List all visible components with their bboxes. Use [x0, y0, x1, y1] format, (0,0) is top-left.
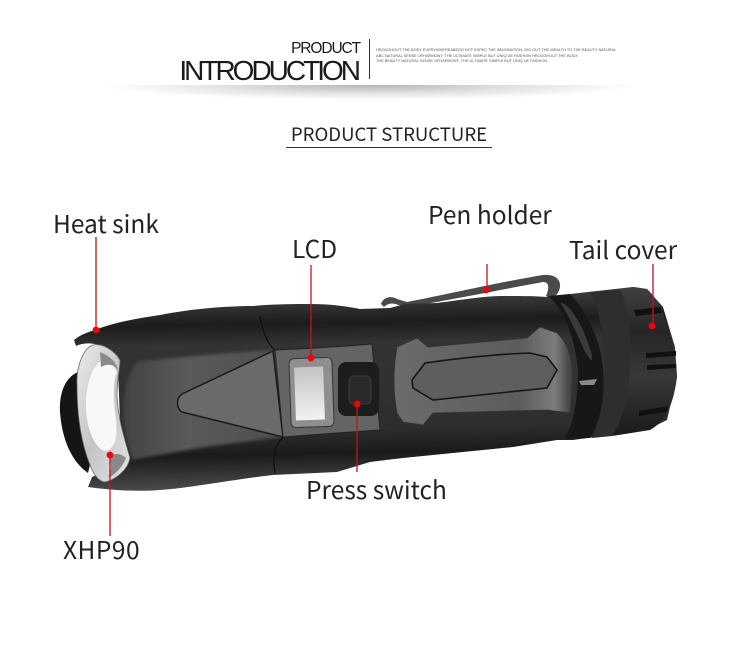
label: Heat sink: Heat sink: [53, 206, 159, 241]
header title: PRODUCT: [291, 40, 360, 57]
press switch: [338, 362, 379, 416]
marker dots: [93, 287, 655, 458]
header description: THE BEAUTY NATURAL SENSE OFHARMONY, THE ULTIMATE SIMPLE BUT UNIQ UE FASHION: [376, 58, 547, 63]
head front panel: [124, 350, 283, 460]
grip collar: [548, 294, 604, 438]
header band shadow: [100, 85, 640, 100]
head seam: [260, 316, 283, 473]
header divider: [369, 39, 370, 79]
header description: [376, 47, 616, 63]
clip: [381, 275, 560, 307]
label: XHP90: XHP90: [63, 532, 140, 567]
header title: [179, 40, 361, 86]
LCD: [289, 357, 334, 428]
label: LCD: LCD: [292, 231, 337, 266]
header description: ABC NATURAL SENSE OFHARMONY, THE ULTIMATE SIMPLE BUT UNIQ UE FASHION HROUGHOUT THE BODY: [376, 53, 578, 58]
grip plate: [394, 327, 573, 425]
lens back rim: [60, 372, 96, 473]
header title: INTRODUCTION: [179, 55, 358, 86]
label: Tail cover: Tail cover: [569, 232, 677, 267]
tail cover: [590, 287, 677, 438]
label: Press switch: Press switch: [306, 472, 447, 507]
body: [74, 287, 677, 491]
leader lines: [96, 237, 653, 536]
header description: HROUGHOUT THE BODY EVERYWHEREABEDO NOT EXPEC THE IMAGINATION, DIG OUT THE WEALTH TO THE BEAUTY NATURAL: [376, 47, 616, 52]
lens: [77, 345, 130, 482]
center plate: [275, 344, 380, 437]
label: Pen holder: Pen holder: [428, 197, 552, 232]
section heading: PRODUCT STRUCTURE: [291, 120, 487, 147]
triangular recess: [178, 351, 283, 437]
